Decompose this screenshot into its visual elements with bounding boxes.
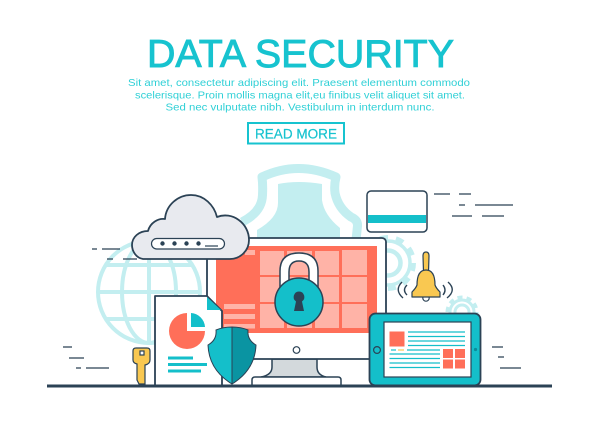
tablet tiles (443, 349, 465, 368)
body text: scelerisque. Proin mollis magna elit,eu finibus velit aliquet sit amet. (135, 90, 465, 102)
background gear large (362, 238, 414, 288)
keyhole (294, 292, 304, 311)
monitor stand (261, 359, 326, 377)
monitor base (252, 377, 341, 386)
monitor screen (216, 246, 377, 333)
password cursor (205, 245, 218, 247)
bell (398, 252, 452, 301)
camera (474, 348, 477, 351)
monitor frame (207, 238, 386, 359)
read more button (248, 123, 344, 144)
shackle (280, 253, 318, 290)
background globe (98, 241, 200, 343)
bell handle (423, 252, 429, 272)
tablet text lines (390, 332, 465, 368)
tablet (370, 314, 480, 386)
title: DATA SECURITY (147, 33, 454, 76)
tablet image (390, 332, 404, 346)
home button (374, 347, 380, 353)
background shield (242, 168, 358, 240)
credit card (367, 191, 427, 232)
bell body (412, 270, 440, 297)
read more button: READ MORE (255, 126, 337, 142)
padlock (275, 253, 323, 326)
tablet screen (384, 322, 471, 377)
speed lines (63, 194, 521, 368)
cloud (132, 195, 249, 259)
body text (128, 77, 470, 114)
monitor (207, 238, 386, 386)
body text: Sit amet, consectetur adipiscing elit. Praesent elementum commodo (128, 77, 470, 89)
lock body (275, 278, 323, 326)
password dots (160, 241, 201, 246)
folded corner (207, 297, 221, 310)
background gear small (448, 298, 476, 326)
ground line (47, 384, 552, 388)
text lines (168, 356, 207, 372)
password field (152, 238, 224, 249)
shield (208, 327, 256, 384)
bell clapper (423, 295, 429, 301)
bell waves (398, 282, 452, 298)
body text: Sed nec vulputate nibh. Vestibulum in interdum nunc. (166, 102, 434, 114)
power button (293, 347, 300, 353)
pie chart (169, 313, 205, 349)
key (133, 348, 150, 384)
screen tiles (224, 250, 367, 328)
document (155, 296, 222, 386)
